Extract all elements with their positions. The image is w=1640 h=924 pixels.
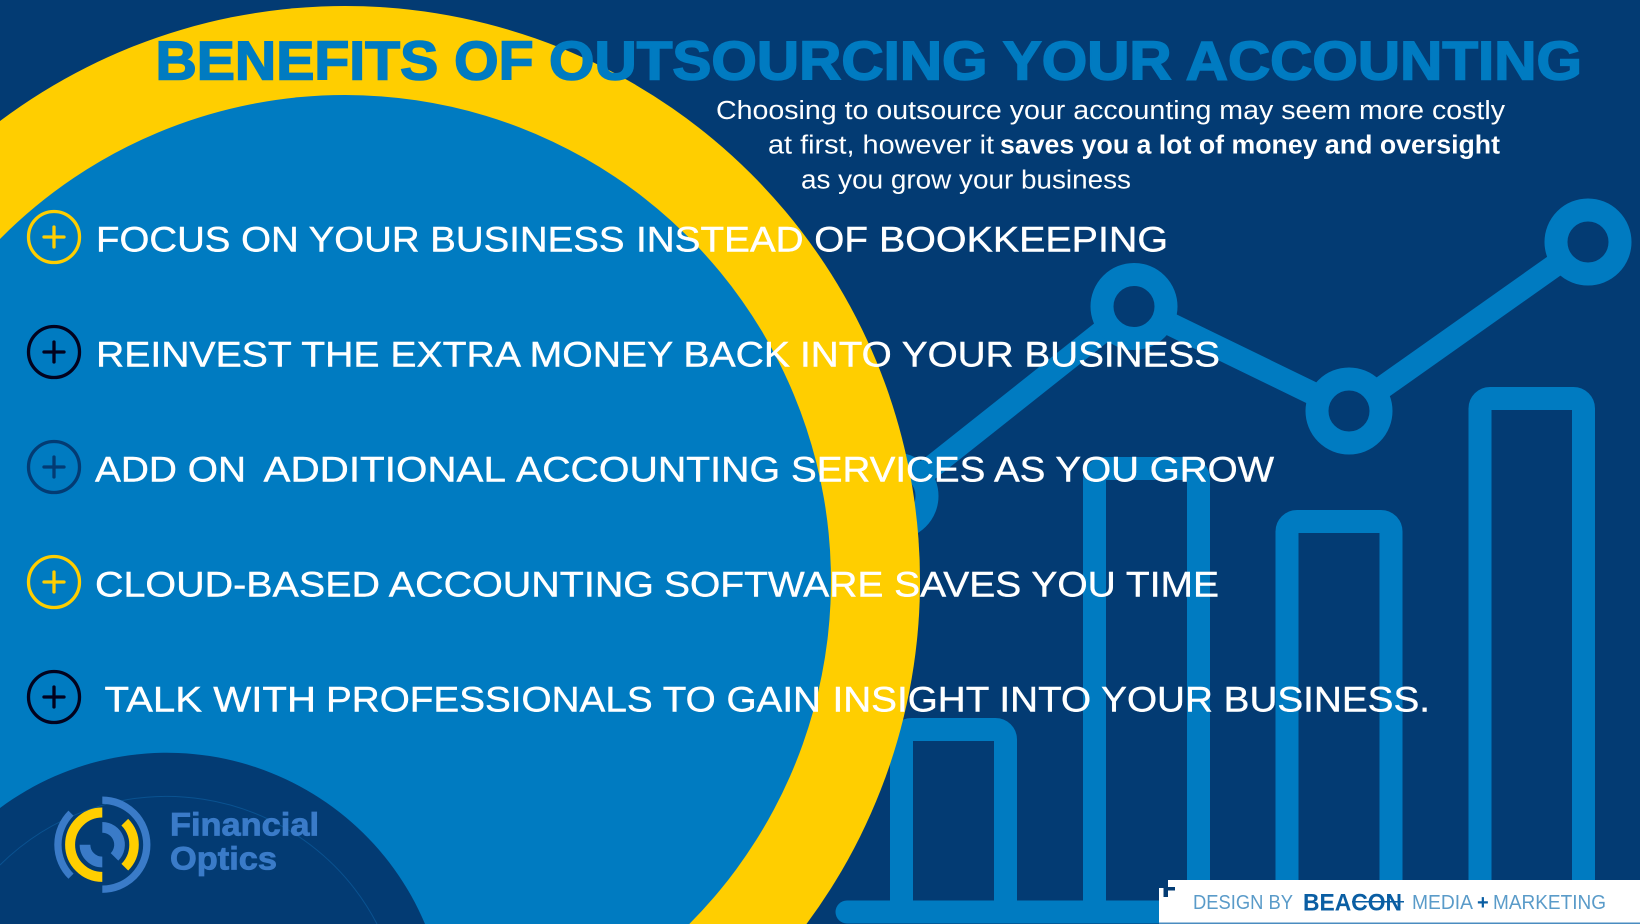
benefit 3 text (95, 450, 1275, 490)
credit text: + (1477, 892, 1489, 914)
benefit 2 text: INTO YOUR BUSINESS (800, 334, 1220, 374)
thin inner ring (0, 796, 377, 924)
trend point 4 (1556, 210, 1620, 274)
benefit 5 (28, 672, 1430, 722)
bar 2 (1094, 468, 1198, 912)
benefit 5 text: PROFESSIONALS TO GAIN (326, 680, 821, 720)
benefit 3 text: ADDITIONAL (264, 450, 506, 490)
outer right arc (102, 800, 147, 889)
benefit 2 text: REINVEST THE EXTRA MONEY BACK (96, 334, 790, 374)
icon: navy plus (28, 442, 80, 492)
bar 3 (1287, 522, 1391, 912)
strip background (1159, 880, 1640, 923)
benefit 4 text (95, 564, 1219, 604)
bar 1 (902, 730, 1006, 912)
intro text: at first, however it (768, 132, 994, 160)
intro text: Choosing to outsource your accounting may seem more costly (716, 97, 1505, 125)
trend point 2 (1102, 274, 1166, 338)
chart: bars and trend line (847, 210, 1630, 912)
benefit 1 text: FOCUS ON YOUR BUSINESS (96, 220, 624, 260)
benefit 1 text: INSTEAD OF (636, 220, 868, 260)
icon: yellow plus (28, 556, 80, 608)
trend point 1 (863, 464, 927, 528)
icon: black plus (28, 672, 80, 722)
yellow right arc (125, 822, 134, 867)
benefit 5 text: TALK WITH (104, 680, 316, 720)
credit text (1193, 890, 1606, 916)
yellow ring (0, 6, 920, 924)
credit text: DESIGN BY (1193, 892, 1293, 914)
benefit 4 text: CLOUD-BASED ACCOUNTING (95, 564, 654, 604)
credit text: MEDIA (1412, 892, 1474, 914)
yellow left arc (70, 812, 102, 877)
blue disc (0, 95, 831, 924)
benefit 3 text: SERVICES AS YOU GROW (791, 450, 1275, 490)
intro text: saves you a lot of money and oversight (1000, 132, 1501, 160)
benefit 5 text (104, 680, 1430, 720)
benefit 2 (28, 326, 1220, 378)
credit strip (1159, 880, 1640, 924)
intro text: as you grow your business (801, 166, 1131, 194)
benefit 3 text: ACCOUNTING (516, 450, 780, 490)
strip bottom line (1159, 922, 1640, 924)
title: OUTSOURCING YOUR ACCOUNTING (549, 30, 1582, 92)
logo wordmark: Financial (170, 807, 319, 843)
title: BENEFITS OF (156, 30, 534, 92)
dark corner circle (0, 753, 425, 924)
credit text: BEACON (1303, 890, 1402, 916)
benefit 1 text: BOOKKEEPING (879, 220, 1168, 260)
logo wordmark: Optics (170, 841, 277, 877)
benefit 4 (28, 556, 1219, 608)
icon: yellow plus (28, 212, 80, 262)
benefit 3 (28, 442, 1275, 492)
benefit 4 text: SOFTWARE SAVES YOU TIME (664, 564, 1219, 604)
icon: black plus (28, 326, 80, 378)
strip corner mark (1164, 887, 1175, 897)
title (156, 30, 1582, 92)
benefit 1 (28, 212, 1168, 262)
trend line (895, 242, 1588, 496)
benefit 2 text (96, 334, 1220, 374)
benefit 1 text (96, 220, 1168, 260)
inner left arc (85, 845, 102, 862)
chart baseline (847, 900, 1630, 924)
benefit 3 text: ADD ON (95, 450, 246, 490)
logo: Financial Optics (58, 800, 319, 889)
benefits list (28, 212, 1430, 722)
inner right arc (102, 827, 120, 857)
trend point 3 (1317, 379, 1381, 443)
intro text (716, 97, 1505, 194)
credit text: MARKETING (1493, 892, 1606, 914)
benefit 5 text: INSIGHT INTO YOUR BUSINESS. (832, 680, 1430, 720)
bar 4 (1480, 398, 1584, 912)
outer left arc (58, 813, 71, 876)
logo wordmark (170, 807, 319, 877)
logo mark (58, 800, 147, 889)
